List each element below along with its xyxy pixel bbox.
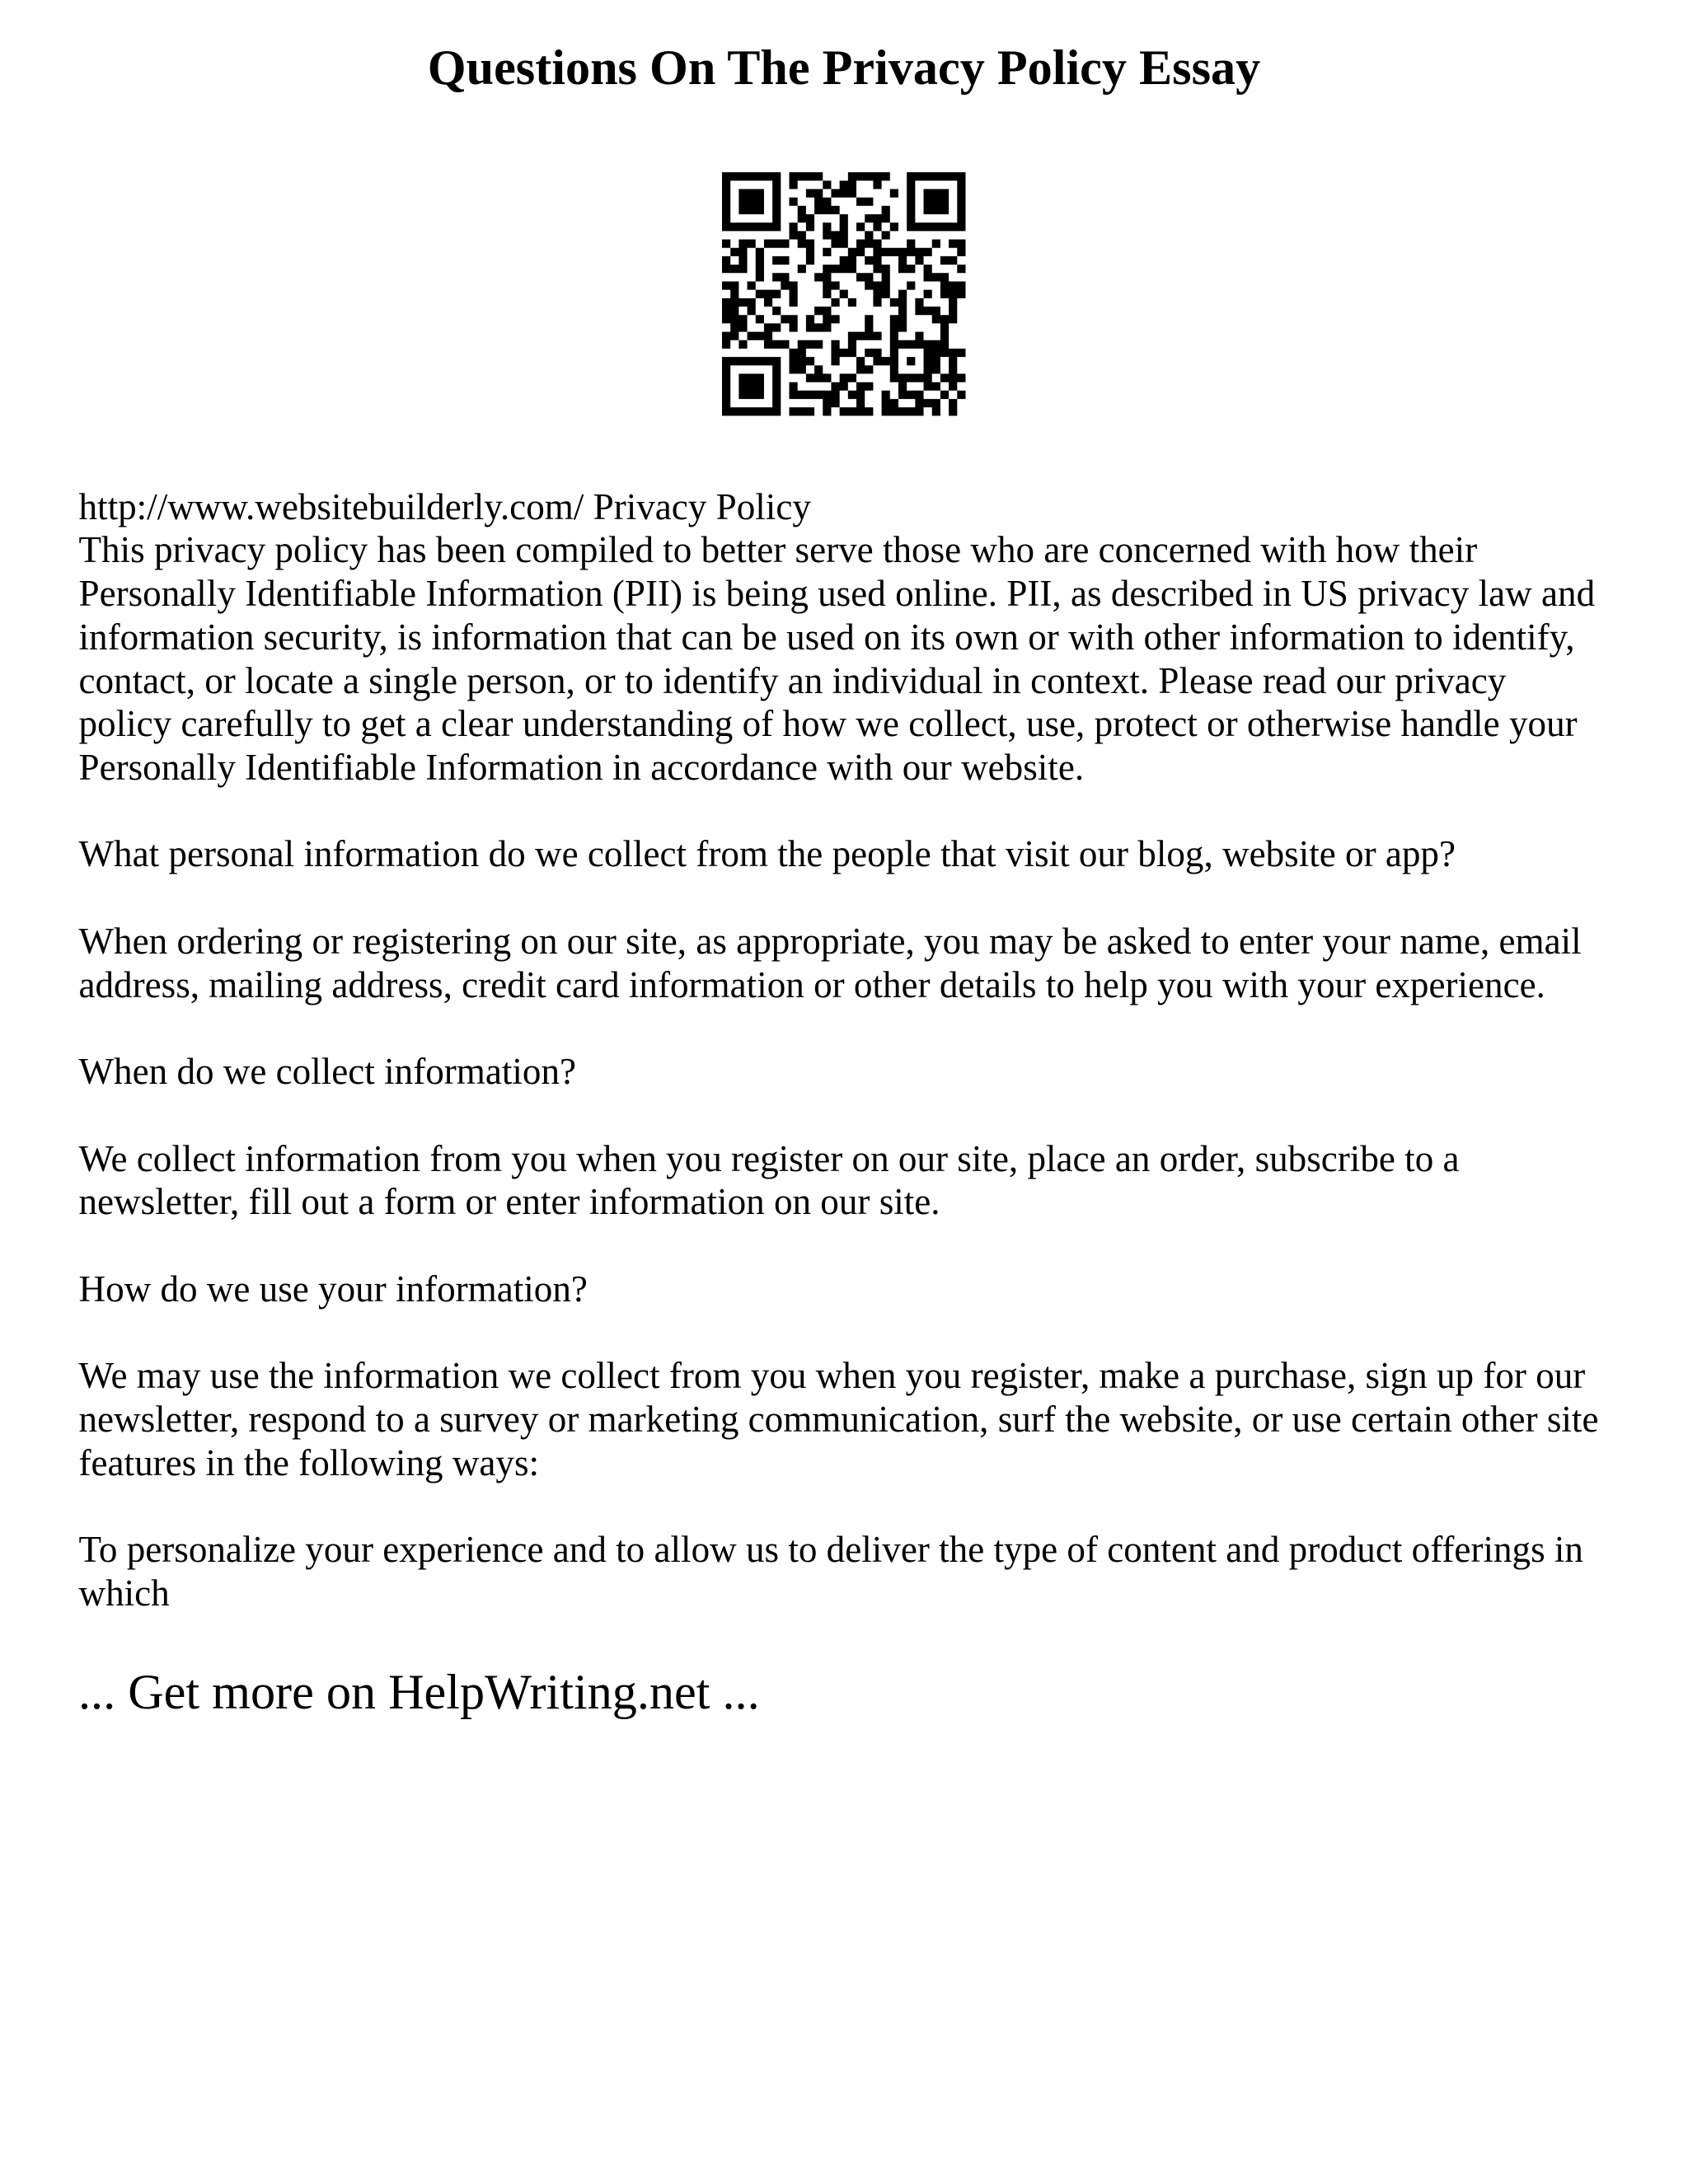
paragraph: personalization <box>79 1529 1583 1614</box>
text block: privacy policy essay body <box>79 486 1598 1614</box>
paragraph: personalization: which <box>79 1572 170 1614</box>
paragraph: use of information: We may use the information we collect from you when you register, make a purchase, sign up for our <box>79 1355 1585 1396</box>
paragraph: collection moments <box>79 1138 1460 1222</box>
paragraph: collection moments: newsletter, fill out a form or enter information on our site. <box>79 1181 940 1222</box>
paragraph: introduction: policy carefully to get a clear understanding of how we collect, use, protect or otherwise handle your <box>79 703 1578 744</box>
paragraph: ordering or registering: address, mailing address, credit card information or other details to help you with your experience. <box>79 964 1545 1005</box>
paragraph: introduction: Personally Identifiable Information in accordance with our website. <box>79 747 1084 788</box>
paragraph: introduction: information security, is information that can be used on its own or with other information to identify, <box>79 616 1575 658</box>
paragraph: introduction <box>79 486 1595 788</box>
paragraph: use of information <box>79 1355 1598 1483</box>
paragraph: introduction: http://www.websitebuilderly.com/ Privacy Policy <box>79 486 811 527</box>
paragraph: introduction: This privacy policy has been compiled to better serve those who are concerned with how their <box>79 529 1477 570</box>
paragraph: use of information: newsletter, respond to a survey or marketing communication, surf the website, or use certain other site <box>79 1399 1598 1440</box>
paragraph: personalization: To personalize your experience and to allow us to deliver the type of content and product offerings in <box>79 1529 1583 1570</box>
icon: QR code <box>722 172 966 415</box>
title: Questions On The Privacy Policy Essay <box>428 40 1260 96</box>
question: when information is collected: When do we collect information? <box>79 1051 576 1092</box>
question: what information is collected: What personal information do we collect from the people that visit our blog, website or app? <box>79 833 1456 874</box>
paragraph: introduction: Personally Identifiable Information (PII) is being used online. PII, as described in US privacy law and <box>79 573 1595 614</box>
paragraph: introduction: contact, or locate a single person, or to identify an individual in context. Please read our privacy <box>79 660 1506 701</box>
paragraph: ordering or registering: When ordering or registering on our site, as appropriate, you may be asked to enter your name, email <box>79 921 1582 962</box>
call to action: ... Get more on HelpWriting.net ... <box>78 1665 760 1719</box>
question: how information is used: How do we use your information? <box>79 1268 588 1310</box>
paragraph: collection moments: We collect information from you when you register on our site, place an order, subscribe to a <box>79 1138 1460 1179</box>
paragraph: ordering or registering <box>79 921 1582 1005</box>
paragraph: use of information: features in the following ways: <box>79 1442 539 1483</box>
